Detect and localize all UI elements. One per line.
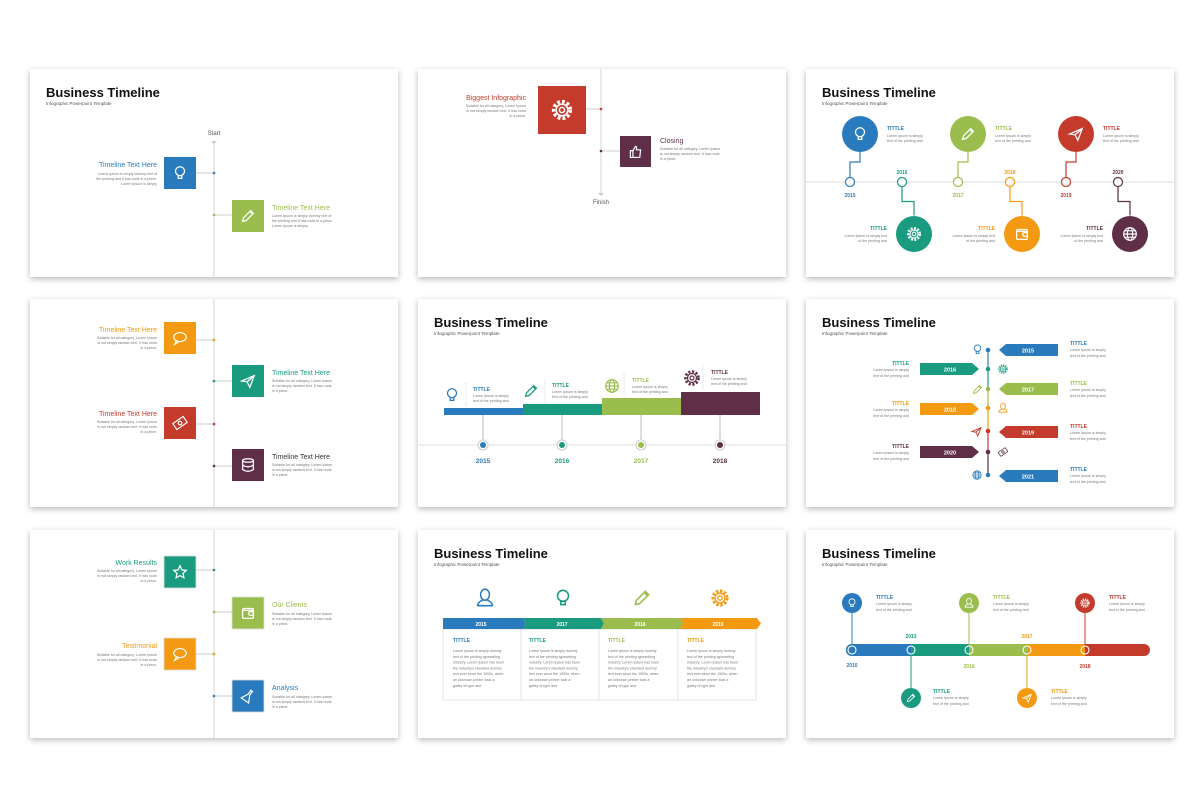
item: biggest infographic: Biggest Infographic <box>466 95 526 102</box>
point 2016 <box>959 593 1029 670</box>
item: biggest infographic: in a piece. <box>510 114 526 118</box>
item testimonial: Testimonial <box>122 643 157 650</box>
item analysis: Analysis <box>272 685 299 692</box>
entry 2017: TITTLE <box>1070 381 1088 387</box>
entry 2015: Lorem Ipsum is simply <box>1070 348 1106 352</box>
arrow segment 2018: an unknown printer took a <box>608 678 649 682</box>
item red: Timeline Text Here <box>99 411 157 418</box>
milestone 2016: of the printing and <box>858 239 887 243</box>
item: biggest infographic <box>466 86 602 134</box>
item orange: in a piece. <box>141 346 157 350</box>
milestone 2019 <box>1058 116 1139 199</box>
step 2015: TITTLE <box>473 387 491 393</box>
point 2018: TITTLE <box>1109 595 1127 601</box>
title: Infographic Powerpoint Template <box>822 331 888 336</box>
point 2013: 2013 <box>905 634 917 640</box>
item orange: is not simply random text. It has roots <box>97 341 157 345</box>
arrow segment 2019: TITTLE <box>687 638 705 644</box>
item 1 blue: Timeline Text Here <box>99 162 157 169</box>
entry 2017: Lorem Ipsum is simply <box>1070 388 1106 392</box>
entry 2019: Lorem Ipsum is simply <box>1070 431 1106 435</box>
item orange: Timeline Text Here <box>99 327 157 334</box>
entry 2016: TITTLE <box>892 361 910 367</box>
milestone 2015: TITTLE <box>887 126 905 132</box>
point 2013 <box>901 634 969 708</box>
step 2015: text of the printing and <box>473 399 509 403</box>
arrow segment 2018: the industry's standard dummy <box>608 666 657 670</box>
step 2017: TITTLE <box>632 378 650 384</box>
item teal: in a piece. <box>272 389 288 393</box>
point 2018: Lorem Ipsum is simply <box>1109 602 1145 606</box>
milestone 2020 <box>1060 170 1148 252</box>
entry 2018: Lorem Ipsum is simply <box>873 408 909 412</box>
milestone 2016: TITTLE <box>870 226 888 232</box>
item work results: in a piece. <box>141 579 157 583</box>
milestone 2017 <box>950 116 1031 199</box>
item work results: is not simply random text. It has roots <box>97 574 157 578</box>
item orange: Suitable for all category, Lorem Ipsum <box>97 336 157 340</box>
title: Business Timeline <box>822 546 936 561</box>
title: Business Timeline <box>822 315 936 330</box>
step 2017: text of the printing and <box>632 390 668 394</box>
entry 2016: text of the printing and <box>873 374 909 378</box>
step 2018: TITTLE <box>711 370 729 376</box>
milestone 2018: 2018 <box>1004 170 1016 176</box>
step 2018: text of the printing and <box>711 382 747 386</box>
step 2015 <box>444 383 523 465</box>
item our clients: Suitable for all category, Lorem Ipsum <box>272 612 332 616</box>
arrow segment 2019: galley of type and <box>687 684 715 688</box>
slide 2: biggest infographic <box>418 69 786 277</box>
arrow segment 2017: TITTLE <box>529 638 547 644</box>
arrow segment 2015: industry. Lorem Ipsum has been <box>453 661 504 665</box>
step 2016: Lorem Ipsum is simply <box>552 390 588 394</box>
arrow segment 2017: text ever since the 1500s, when <box>529 672 580 676</box>
item testimonial <box>97 638 215 670</box>
milestone 2019: text of the printing and <box>1103 139 1139 143</box>
item teal <box>213 365 332 397</box>
finish label: Finish <box>593 200 609 206</box>
item red <box>97 407 215 439</box>
point 2017: TITTLE <box>1051 689 1069 695</box>
finish label <box>593 193 609 206</box>
item: closing <box>600 136 720 167</box>
entry 2020: TITTLE <box>892 444 910 450</box>
entry 2015: TITTLE <box>1070 341 1088 347</box>
item analysis <box>213 680 332 712</box>
arrow segment 2019: the industry's standard dummy <box>687 666 736 670</box>
step 2015: 2015 <box>476 458 491 465</box>
item teal: is not simply random text. It has roots <box>272 384 332 388</box>
step 2016: text of the printing and <box>552 395 588 399</box>
start label <box>208 131 221 144</box>
arrow segment 2018: text ever since the 1500s, when <box>608 672 659 676</box>
point 2010 <box>842 593 912 669</box>
vertical line <box>987 350 989 475</box>
item our clients: in a piece. <box>272 622 288 626</box>
arrow segment 2017: the industry's standard dummy <box>529 666 578 670</box>
entry 2017 <box>974 381 1106 398</box>
item: biggest infographic: Suitable for all category, Lorem Ipsum <box>466 104 526 108</box>
point 2017 <box>1017 634 1087 708</box>
entry 2021: Lorem Ipsum is simply <box>1070 474 1106 478</box>
arrow segment 2015 <box>443 618 526 688</box>
slide 5: stepped bars timeline <box>418 299 786 507</box>
item analysis: Suitable for all category, Lorem Ipsum <box>272 695 332 699</box>
entry 2016: 2016 <box>944 368 956 374</box>
step 2017: Lorem Ipsum is simply <box>632 385 668 389</box>
item 1 blue <box>96 157 215 189</box>
item analysis: in a piece. <box>272 705 288 709</box>
step 2016: 2016 <box>555 458 570 465</box>
entry 2021: TITTLE <box>1070 467 1088 473</box>
item purple: Timeline Text Here <box>272 454 330 461</box>
item our clients <box>213 597 332 629</box>
item purple: Suitable for all category, Lorem Ipsum <box>272 463 332 467</box>
milestone 2019: 2019 <box>1060 193 1072 199</box>
milestone 2017: Lorem Ipsum is simply <box>995 134 1031 138</box>
milestone 2015: 2015 <box>844 193 856 199</box>
arrow segment 2019: text ever since the 1500s, when <box>687 672 738 676</box>
arrow segment 2019: Lorem Ipsum is simply dummy <box>687 649 736 653</box>
title: Business Timeline <box>434 315 548 330</box>
title: Business Timeline <box>822 85 936 100</box>
item: closing: in a piece. <box>660 157 676 161</box>
arrow segment 2017: industry. Lorem Ipsum has been <box>529 661 580 665</box>
arrow segment 2015: the industry's standard dummy <box>453 666 502 670</box>
milestone 2017: 2017 <box>952 193 964 199</box>
entry 2019: TITTLE <box>1070 424 1088 430</box>
milestone 2016: Lorem Ipsum is simply text <box>844 234 887 238</box>
arrow segment 2017: galley of type and <box>529 684 557 688</box>
entry 2019: text of the printing and <box>1070 437 1106 441</box>
milestone 2017: TITTLE <box>995 126 1013 132</box>
item testimonial: is not simply random text. It has roots <box>97 658 157 662</box>
step 2018: 2018 <box>713 458 728 465</box>
entry 2020 <box>873 444 1008 461</box>
item red: is not simply random text. It has roots <box>97 425 157 429</box>
point 2016: text of the printing and <box>993 608 1029 612</box>
bar <box>846 644 1150 656</box>
item testimonial: in a piece. <box>141 663 157 667</box>
arrow segment 2017: an unknown printer took a <box>529 678 570 682</box>
step 2015: Lorem Ipsum is simply <box>473 394 509 398</box>
item purple: is not simply random text. It has roots <box>272 468 332 472</box>
arrow segment 2018: TITTLE <box>608 638 626 644</box>
arrow segment 2017: 2017 <box>556 622 568 628</box>
milestone 2019: TITTLE <box>1103 126 1121 132</box>
title: Infographic Powerpoint Template <box>434 331 500 336</box>
entry 2018: 2018 <box>944 408 956 414</box>
entry 2020: text of the printing and <box>873 457 909 461</box>
item red: in a piece. <box>141 430 157 434</box>
arrow segment 2015: TITTLE <box>453 638 471 644</box>
arrow segment 2019: text of the printing typesetting <box>687 655 734 659</box>
step 2018: Lorem Ipsum is simply <box>711 377 747 381</box>
entry 2020: Lorem Ipsum is simply <box>873 451 909 455</box>
title: Business Timeline <box>46 85 160 100</box>
point 2010: text of the printing and <box>876 608 912 612</box>
milestone 2018 <box>952 170 1040 252</box>
item work results <box>97 556 215 588</box>
point 2013: Lorem Ipsum is simply <box>933 696 969 700</box>
item orange <box>97 322 215 354</box>
title: Infographic Powerpoint Template <box>822 562 888 567</box>
text box frame <box>443 629 756 700</box>
slide 3: circle timeline 2015-2020 <box>806 69 1174 277</box>
arrow segment 2015: 2015 <box>475 622 487 628</box>
entry 2017: text of the printing and <box>1070 394 1106 398</box>
entry 2019: 2019 <box>1022 430 1034 436</box>
slide 6: vertical flag timeline <box>806 299 1174 507</box>
milestone 2017: text of the printing and <box>995 139 1031 143</box>
milestone 2015: text of the printing and <box>887 139 923 143</box>
item 2 green <box>213 200 333 232</box>
arrow segment 2018: 2018 <box>634 622 646 628</box>
item our clients: Our Clients <box>272 602 308 609</box>
slide 9: rounded bar timeline 2010-2018 <box>806 530 1174 738</box>
milestone 2016: 2016 <box>896 170 908 176</box>
entry 2016 <box>873 361 1007 378</box>
item work results: Suitable for all category, Lorem Ipsum <box>97 569 157 573</box>
item 2 green: Timeline Text Here <box>272 205 330 212</box>
arrow segment 2017 <box>523 618 604 688</box>
point 2018: text of the printing and <box>1109 608 1145 612</box>
arrow segment 2015: text of the printing typesetting <box>453 655 500 659</box>
title: Business Timeline <box>434 546 548 561</box>
item 1 blue: Lorem Ipsum is simply dummy text of <box>98 172 157 176</box>
arrow segment 2018 <box>601 618 683 688</box>
entry 2021: text of the printing and <box>1070 480 1106 484</box>
point 2013: TITTLE <box>933 689 951 695</box>
title: Infographic Powerpoint Template <box>434 562 500 567</box>
entry 2015: text of the printing and <box>1070 354 1106 358</box>
arrow segment 2018: galley of type and <box>608 684 636 688</box>
item 1 blue: Lorem Ipsum is simply <box>121 182 157 186</box>
point 2013: text of the printing and <box>933 702 969 706</box>
milestone 2015: Lorem Ipsum is simply <box>887 134 923 138</box>
item: closing: is not simply random text. It has roots <box>660 152 720 156</box>
arrow segment 2019 <box>680 618 761 688</box>
point 2017: text of the printing and <box>1051 702 1087 706</box>
start label: Start <box>208 131 221 137</box>
point 2017: Lorem Ipsum is simply <box>1051 696 1087 700</box>
item purple <box>213 449 332 481</box>
arrow segment 2015: galley of type and <box>453 684 481 688</box>
milestone 2020: Lorem Ipsum is simply text <box>1060 234 1103 238</box>
step 2017: 2017 <box>634 458 649 465</box>
title: Infographic Powerpoint Template <box>46 101 112 106</box>
item purple: in a piece. <box>272 473 288 477</box>
milestone 2020: of the printing and <box>1074 239 1103 243</box>
milestone 2020: 2020 <box>1112 170 1124 176</box>
point 2016: 2016 <box>963 664 975 670</box>
entry 2021: 2021 <box>1022 474 1034 480</box>
arrow segment 2018: industry. Lorem Ipsum has been <box>608 661 659 665</box>
item analysis: is not simply random text. It has roots <box>272 700 332 704</box>
item: closing: Closing <box>660 138 683 145</box>
arrow segment 2015: text ever since the 1500s, when <box>453 672 504 676</box>
point 2016: TITTLE <box>993 595 1011 601</box>
item 2 green: Lorem Ipsum is simply <box>272 224 308 228</box>
milestone 2016 <box>844 170 932 252</box>
item testimonial: Suitable for all category, Lorem Ipsum <box>97 653 157 657</box>
step 2018 <box>681 366 760 465</box>
slide 1: start timeline <box>30 69 398 277</box>
item 2 green: the printing and it has roots in a piece. <box>272 219 333 223</box>
entry 2018: TITTLE <box>892 401 910 407</box>
milestone 2018: of the printing and <box>966 239 995 243</box>
item: biggest infographic: is not simply random text. It has roots <box>466 109 526 113</box>
entry 2016: Lorem Ipsum is simply <box>873 368 909 372</box>
arrow segment 2015: an unknown printer took a <box>453 678 494 682</box>
step 2016: TITTLE <box>552 383 570 389</box>
step 2017 <box>602 373 681 465</box>
item our clients: is not simply random text. It has roots <box>272 617 332 621</box>
milestone 2015 <box>842 116 923 199</box>
milestone 2019: Lorem Ipsum is simply <box>1103 134 1139 138</box>
entry 2018: text of the printing and <box>873 414 909 418</box>
point 2018 <box>1075 593 1145 670</box>
title: Infographic Powerpoint Template <box>822 101 888 106</box>
point 2010: 2010 <box>846 663 858 669</box>
step 2016 <box>523 379 602 465</box>
milestone 2018: TITTLE <box>978 226 996 232</box>
entry 2017: 2017 <box>1022 388 1034 394</box>
arrow segment 2018: text of the printing typesetting <box>608 655 655 659</box>
item: closing: Suitable for all category, Lorem Ipsum <box>660 147 720 151</box>
slide 4: four squares timeline <box>30 299 398 507</box>
slide 7: work results timeline <box>30 530 398 738</box>
point 2010: Lorem Ipsum is simply <box>876 602 912 606</box>
arrow segment 2018: Lorem Ipsum is simply dummy <box>608 649 657 653</box>
item 1 blue: the printing and it has roots in a piece. <box>96 177 157 181</box>
entry 2015 <box>974 341 1106 358</box>
milestone 2020: TITTLE <box>1086 226 1104 232</box>
slide 8: arrow band with text boxes <box>418 530 786 738</box>
entry 2018 <box>873 401 1007 418</box>
point 2016: Lorem Ipsum is simply <box>993 602 1029 606</box>
arrow segment 2019: an unknown printer took a <box>687 678 728 682</box>
item red: Suitable for all category, Lorem Ipsum <box>97 420 157 424</box>
item work results: Work Results <box>116 560 157 567</box>
entry 2021 <box>973 467 1106 484</box>
entry 2015: 2015 <box>1022 348 1034 354</box>
point 2017: 2017 <box>1021 634 1033 640</box>
arrow segment 2017: text of the printing typesetting <box>529 655 576 659</box>
item teal: Timeline Text Here <box>272 370 330 377</box>
point 2010: TITTLE <box>876 595 894 601</box>
arrow segment 2019: 2019 <box>712 622 724 628</box>
arrow segment 2015: Lorem Ipsum is simply dummy <box>453 649 502 653</box>
item teal: Suitable for all category, Lorem Ipsum <box>272 379 332 383</box>
point 2018: 2018 <box>1079 664 1091 670</box>
item 2 green: Lorem Ipsum is simply dummy text of <box>272 214 331 218</box>
icons row <box>477 589 727 606</box>
entry 2020: 2020 <box>944 450 956 456</box>
milestone 2018: Lorem Ipsum is simply text <box>952 234 995 238</box>
arrow segment 2019: industry. Lorem Ipsum has been <box>687 661 738 665</box>
entry 2019 <box>972 424 1106 441</box>
arrow segment 2017: Lorem Ipsum is simply dummy <box>529 649 578 653</box>
